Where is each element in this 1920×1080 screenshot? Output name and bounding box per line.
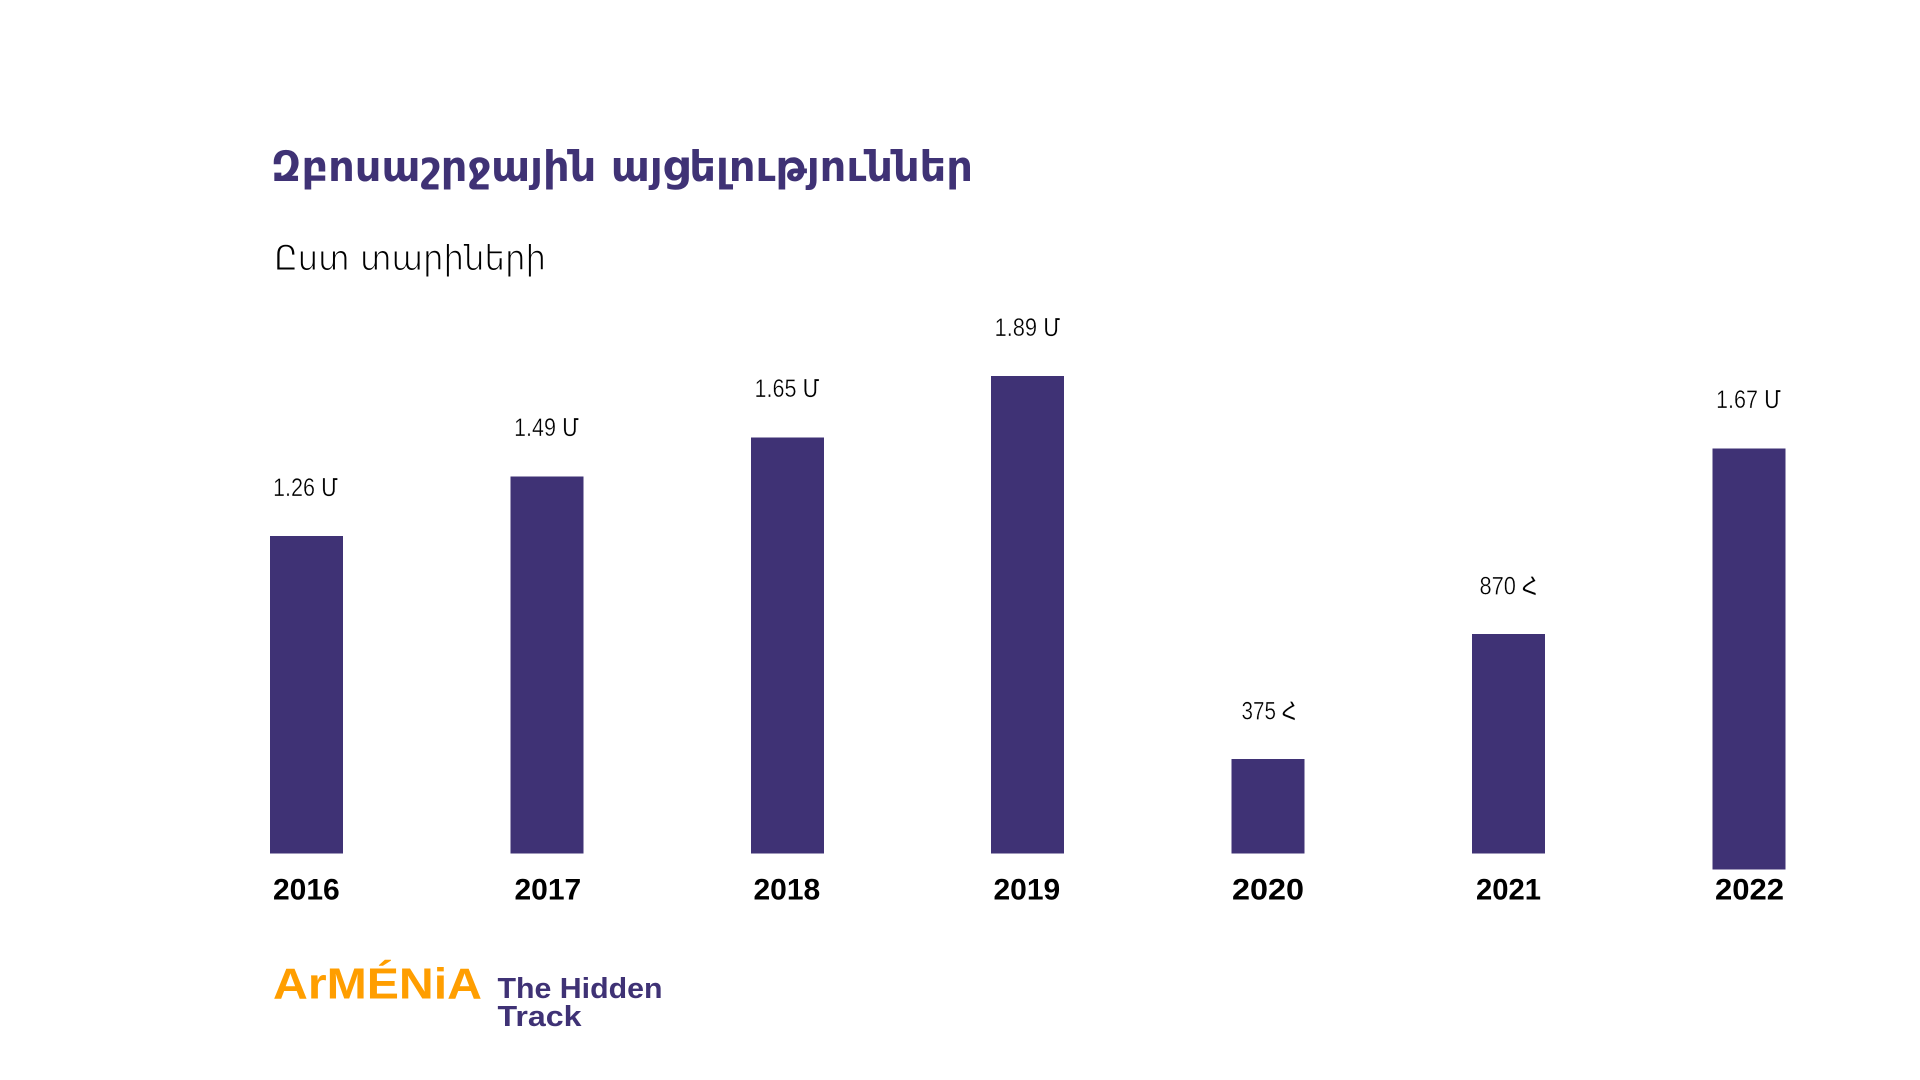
logo: Armenia wordmark: ArMÉNiA	[273, 958, 482, 1008]
subtitle: Ըստ տարիների	[274, 239, 546, 279]
logo	[273, 958, 662, 1033]
bar group: 2019: 1.89 Մ	[994, 314, 1061, 342]
bar group: 2020	[1232, 698, 1304, 906]
bar group: 2020: 2020	[1232, 874, 1304, 906]
bar group: 2018	[751, 375, 824, 906]
bar group: 2017: 2017	[514, 874, 581, 906]
logo: The Hidden Track	[498, 973, 662, 1033]
bar group: 2020: 375 Հ	[1242, 698, 1296, 726]
bar group: 2022	[1712, 386, 1786, 906]
logo: The Hidden Track: The Hidden	[498, 973, 662, 1005]
bar group: 2016: 2016	[273, 874, 340, 906]
bar chart	[270, 314, 1786, 906]
bar group: 2018: 1.65 Մ	[754, 375, 820, 403]
bar group: 2021: 2021	[1476, 874, 1541, 906]
bar group: 2017: 1.49 Մ	[514, 414, 579, 442]
logo: The Hidden Track: Track	[498, 1001, 582, 1033]
bar group: 2017	[510, 414, 584, 906]
bar group: 2019	[991, 314, 1064, 906]
bar group: 2022: 2022	[1715, 874, 1784, 906]
bar group: 2021	[1472, 572, 1545, 906]
bar group: 2018: 2018	[754, 874, 820, 906]
bar group: 2016	[270, 474, 343, 906]
bar group: 2016: 1.26 Մ	[273, 474, 338, 502]
bar group: 2021: 870 Հ	[1480, 572, 1538, 600]
bar group: 2022: 1.67 Մ	[1716, 386, 1781, 414]
title: Զբոսաշրջային այցելություններ	[271, 142, 973, 191]
bar group: 2019: 2019	[994, 874, 1060, 906]
